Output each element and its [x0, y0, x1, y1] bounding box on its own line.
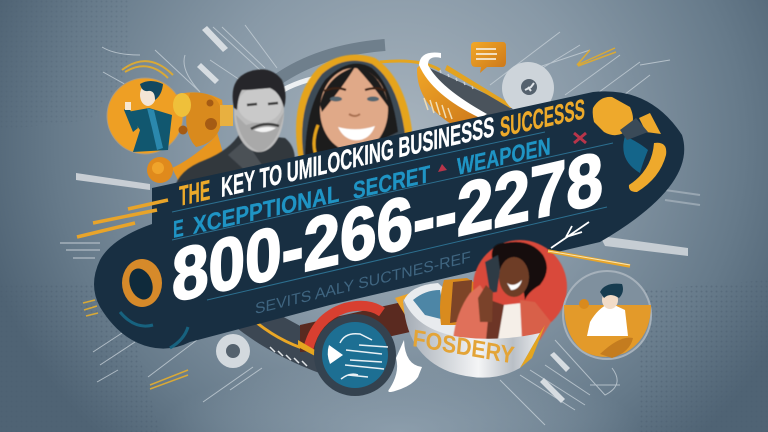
heading: the key to unlocking business success	[179, 93, 585, 212]
decorative gray swoosh behind man	[277, 45, 440, 90]
thin banner rule lines	[172, 132, 613, 300]
subheading: exceptional secret weapon	[173, 133, 551, 244]
lower left gray gear	[216, 334, 250, 368]
band label: FOSDERY	[411, 325, 516, 369]
photo: man with goatee	[172, 69, 295, 205]
illustration: white speech tail	[388, 340, 422, 392]
heading: the key to unlocking business success: THE	[179, 174, 210, 212]
icon: orange connector arrow	[548, 222, 630, 266]
subheading: exceptional secret weapon: XCEPPTIONAL	[193, 180, 339, 240]
illustration: silver FOSDERY band	[403, 298, 545, 378]
illustration: woman on phone in red circle	[453, 240, 567, 340]
illustration: red and brown wheel	[298, 290, 420, 356]
orange speed dashes	[77, 200, 168, 237]
photo: smiling woman	[296, 55, 412, 168]
panel: dark diagonal banner	[94, 91, 684, 349]
subheading: exceptional secret weapon: E	[173, 215, 184, 244]
background pills and pipes	[76, 26, 688, 403]
heading: the key to unlocking business success: KEY TO UMILOCKING BUSINESSS	[221, 111, 494, 203]
icon: small red triangle	[438, 164, 447, 172]
illustration: silver band back and gear	[403, 278, 500, 340]
phone number: 800-266--2278	[172, 136, 603, 318]
icon: orange textured ring	[122, 259, 162, 307]
yellow lower left dashes	[83, 300, 188, 389]
ribbed dark strip under banner	[233, 315, 335, 374]
subheading: exceptional secret weapon: SECRET	[353, 161, 430, 205]
icon: red x mark	[574, 133, 586, 143]
yellow accent arcs top left	[122, 61, 173, 78]
icon: gray gear disc	[502, 62, 554, 114]
yellow accent lines top right	[577, 48, 616, 66]
teal curl accents	[120, 312, 188, 348]
icon: speech bubble	[471, 42, 506, 73]
tagline: SEVITS AALY SUCTNES-REF	[255, 249, 471, 318]
subheading: exceptional secret weapon: WEAPOEN	[457, 133, 551, 181]
illustration: man in orange and gray circle	[563, 271, 651, 359]
heading: the key to unlocking business success: SUCCESSS	[500, 93, 585, 143]
background streak lines	[93, 25, 670, 425]
illustration: businessman in orange circle	[107, 78, 233, 184]
icon: teal document circle	[314, 314, 396, 396]
faint background ribs	[60, 190, 700, 258]
icon: orange cap and crescents on banner end	[593, 97, 666, 192]
icon: ribbed orange scoop	[417, 52, 517, 128]
